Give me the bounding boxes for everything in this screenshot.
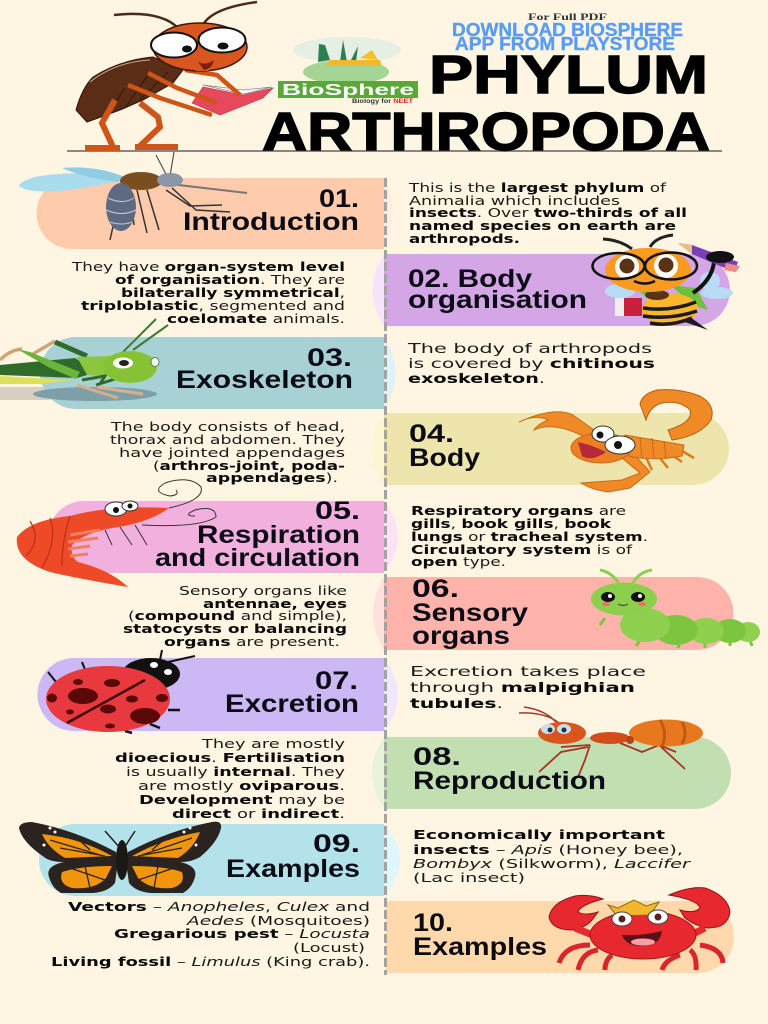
text: 08 description: direct or indirect . (172, 807, 345, 821)
heading: 05 (155, 497, 360, 572)
heading: 04: Body (409, 444, 480, 472)
text: 01 description: insects . Over two-thirds of all (409, 206, 687, 220)
text: For Full PDF: For Full PDF (528, 13, 607, 23)
text: 03 description (406, 341, 655, 387)
heading: 01: 01. (319, 185, 359, 213)
text: 01 description: named species on earth are (409, 219, 676, 233)
text: 08 description: dioecious . Fertilisation (115, 751, 345, 765)
heading: 04 (409, 420, 480, 472)
logo: BioSphere (278, 37, 418, 105)
heading: 07 (225, 667, 359, 718)
heading: 03: Exoskeleton (176, 366, 353, 394)
panel: 05 Respiration band (48, 501, 398, 573)
text: 10 description: (Locust) (293, 941, 365, 955)
text: 04 description: appendages ). (206, 471, 338, 485)
icon: crab with crown (549, 888, 730, 970)
heading: 05: 05. (315, 497, 360, 525)
logo wordmark: BioSphere (282, 82, 414, 99)
heading: 05: Respiration (197, 521, 360, 549)
text: 02 description (71, 260, 345, 326)
text: 08 description (115, 737, 345, 821)
text: 06 description: statocysts or balancing (123, 622, 347, 636)
text: 03 description: exoskeleton . (408, 371, 545, 387)
heading: 10 (413, 909, 547, 961)
text: 06 description: (compound and simple), (128, 609, 347, 623)
text: 02 description: of organisation . They are (115, 273, 345, 287)
icon: mosquito (19, 152, 247, 240)
panel: 01 Introduction band (36, 178, 392, 249)
heading: 09 (226, 830, 360, 883)
text: download banner: DOWNLOAD BIOSPHERE (452, 20, 683, 40)
text: 09 description: Bombyx (Silkworm), Laccifer (413, 857, 692, 871)
text: 01 description: Animalia which includes (409, 194, 620, 208)
text: 07 description: Excretion takes place (410, 664, 646, 680)
heading: 03: 03. (307, 344, 352, 372)
text: 08 description: They are mostly (201, 737, 345, 751)
text: 09 description: (Lac insect) (413, 871, 525, 885)
text: 05 description: gills , book gills , book (411, 517, 612, 531)
heading: 03 (176, 344, 353, 394)
icon: monarch butterfly (19, 822, 221, 893)
title (262, 45, 710, 162)
text: 06 description: organs are present. (164, 635, 340, 649)
heading: 08: 08. (413, 743, 461, 771)
text: download banner: APP FROM PLAYSTORE (455, 34, 675, 54)
heading: 09: 09. (313, 830, 360, 858)
text: 03 description: The body of arthropods (406, 341, 652, 357)
text: 07 description: tubules . (410, 696, 503, 712)
icon: ladybug (46, 650, 195, 733)
text: 06 description: antennae, eyes (203, 597, 347, 611)
icon: cockroach reading a book (76, 2, 273, 148)
text: 05 description: Respiratory organs are (411, 504, 626, 518)
title: ARTHROPODA (262, 102, 710, 162)
text: 02 description: bilaterally symmetrical , (121, 286, 345, 300)
text: 07 description: through malpighian (410, 680, 635, 696)
heading: 08: Reproduction (413, 767, 606, 795)
heading: 10: Examples (413, 933, 547, 961)
text: 02 description: triploblastic , segmented and (81, 299, 345, 313)
text: 03 description: is covered by chitinous (408, 356, 655, 372)
text: 10 description: Aedes (Mosquitoes) (185, 914, 370, 928)
heading: 10: 10. (413, 909, 453, 937)
panel: 06 Sensory organs band (373, 577, 734, 650)
logo tagline: Biology for NEET (352, 98, 413, 105)
heading: 07: Excretion (225, 690, 359, 718)
icon: caterpillar (591, 570, 760, 648)
text: 05 description: lungs or tracheal system . (411, 530, 648, 544)
text: 05 description: Circulatory system is of (411, 543, 633, 557)
heading: 04: 04. (409, 420, 454, 448)
heading: 02: 02. Body (408, 265, 532, 293)
icon: bee with glasses and pencil (592, 235, 740, 330)
heading: 09: Examples (226, 855, 360, 883)
text: 04 description: have jointed appendages (119, 446, 345, 460)
text: 04 description (110, 420, 345, 485)
text: download banner (452, 20, 683, 54)
text: 05 description (411, 504, 648, 569)
heading: 01: Introduction (183, 208, 359, 236)
text: 02 description: coelomate animals. (167, 312, 345, 326)
panel: 08 Reproduction band (372, 737, 731, 809)
panel: 04 Body band (372, 413, 729, 485)
text: 08 description: Development may be (139, 793, 345, 807)
text: 01 description: arthropods. (409, 232, 520, 246)
heading: 06: Sensory (412, 599, 528, 627)
text: 01 description (408, 181, 687, 246)
text: 10 description: Living fossil – Limulus (King crab). (51, 955, 370, 969)
heading: 05: and circulation (155, 544, 360, 572)
heading: 02: organisation (408, 286, 587, 314)
heading: 07: 07. (315, 667, 358, 695)
heading: 06 (412, 575, 528, 650)
text: 07 description (410, 664, 646, 712)
text: 10 description: Gregarious pest – Locusta (114, 927, 370, 941)
heading: 01 (183, 185, 359, 236)
panel: 03 Exoskeleton band (40, 337, 396, 409)
heading: 08 (413, 743, 606, 795)
heading: 06: 06. (412, 575, 459, 603)
text: 04 description: thorax and abdomen. They (110, 433, 345, 447)
text: 06 description: Sensory organs like (179, 584, 347, 598)
panel: 02 Body organisation band (372, 254, 730, 326)
panel: 07 Excretion band (37, 658, 398, 731)
text: 09 description (413, 828, 692, 885)
text: 10 description (51, 900, 370, 969)
heading: 02 (408, 265, 587, 314)
panel: 10 Examples band (386, 901, 734, 973)
text: 05 description: open type. (411, 555, 506, 569)
text: 02 description: They have organ-system level (71, 260, 345, 274)
text: 06 description (123, 584, 347, 649)
heading: 06: organs (412, 622, 510, 650)
text: 08 description: is usually internal . They (126, 765, 345, 779)
panel: 09 Examples band (39, 824, 400, 896)
text: 08 description: are mostly oviparous . (138, 779, 345, 793)
title: PHYLUM (429, 45, 708, 105)
text: 09 description: insects – Apis (Honey bee), (413, 843, 683, 857)
icon: shrimp (17, 480, 216, 587)
text: 09 description: Economically important (413, 828, 665, 842)
text: 01 description: This is the largest phylum of (408, 181, 667, 195)
text: 04 description: The body consists of head, (110, 420, 345, 434)
text: 04 description: (arthros-joint, poda- (153, 459, 345, 473)
icon: scorpion (519, 390, 712, 492)
icon: ant (519, 707, 703, 777)
text: 10 description: Vectors – Anopheles , Culex and (68, 900, 370, 914)
icon: grasshopper (0, 319, 168, 401)
